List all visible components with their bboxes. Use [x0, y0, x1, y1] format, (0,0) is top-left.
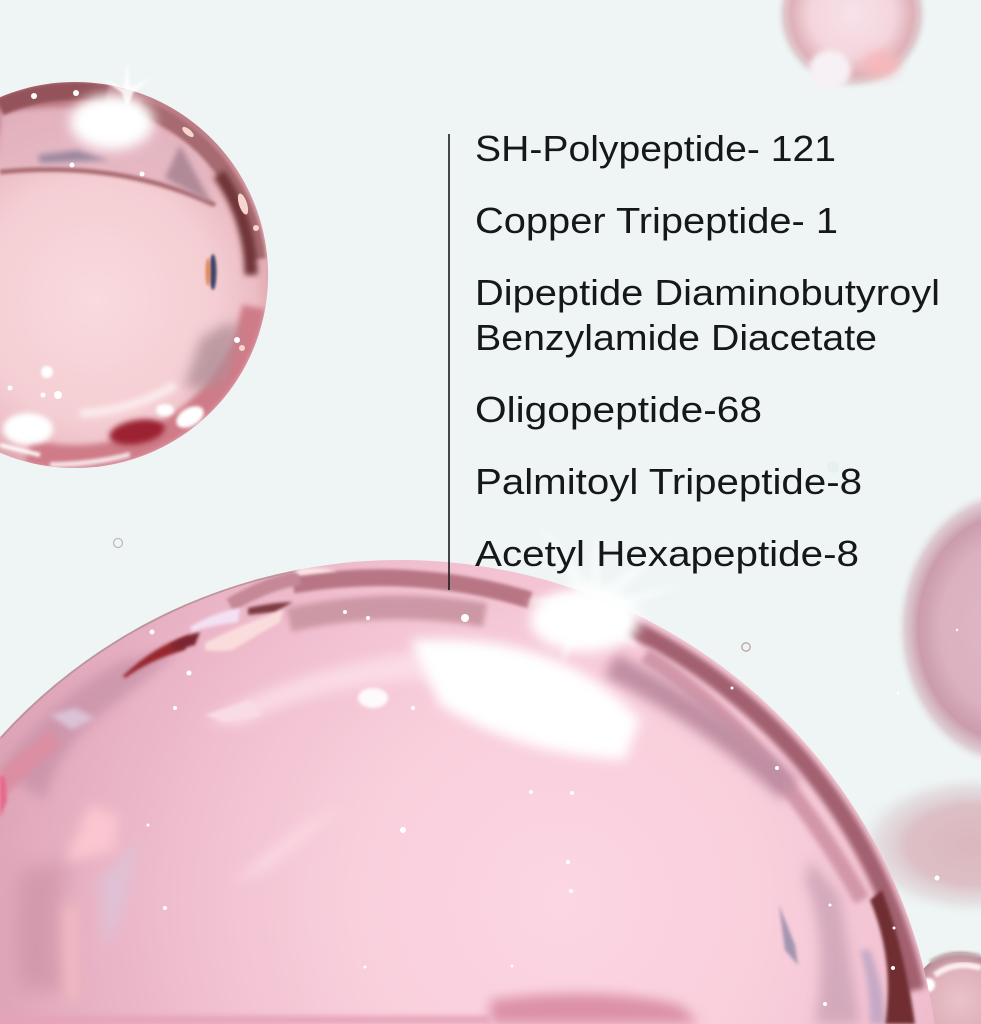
ingredient: Acetyl Hexapeptide-8: Acetyl Hexapeptide-8 — [475, 533, 859, 574]
ingredient: Copper Tripeptide-1: Copper Tripeptide- 1 — [475, 200, 838, 241]
ingredient: Oligopeptide-68: Oligopeptide-68 — [475, 389, 762, 430]
ingredient: Dipeptide Diaminobutyroyl Benzylamide Diacetate: Benzylamide Diacetate — [475, 317, 877, 358]
bubble: top left — [0, 82, 268, 468]
bubble: large centre — [0, 560, 935, 1024]
sparkle on large bubble — [525, 525, 680, 665]
divider line — [448, 134, 450, 590]
tiny droplets — [114, 461, 839, 651]
ingredient: Dipeptide Diaminobutyroyl Benzylamide Diacetate: Dipeptide Diaminobutyroyl — [475, 272, 940, 313]
sparkle on top-left bubble — [104, 62, 150, 110]
blurred bubble: top right — [776, 0, 928, 90]
ingredient: Palmitoyl Tripeptide-8: Palmitoyl Tripeptide-8 — [475, 461, 862, 502]
dust specks outside bubbles — [897, 629, 958, 880]
ingredient: Dipeptide Diaminobutyroyl Benzylamide Diacetate — [475, 272, 940, 358]
blurred bubble: right edge — [850, 490, 981, 920]
small bubble: bottom right — [907, 952, 981, 1024]
ingredient list — [475, 128, 940, 574]
ingredient: SH-Polypeptide-121: SH-Polypeptide- 121 — [475, 128, 836, 169]
